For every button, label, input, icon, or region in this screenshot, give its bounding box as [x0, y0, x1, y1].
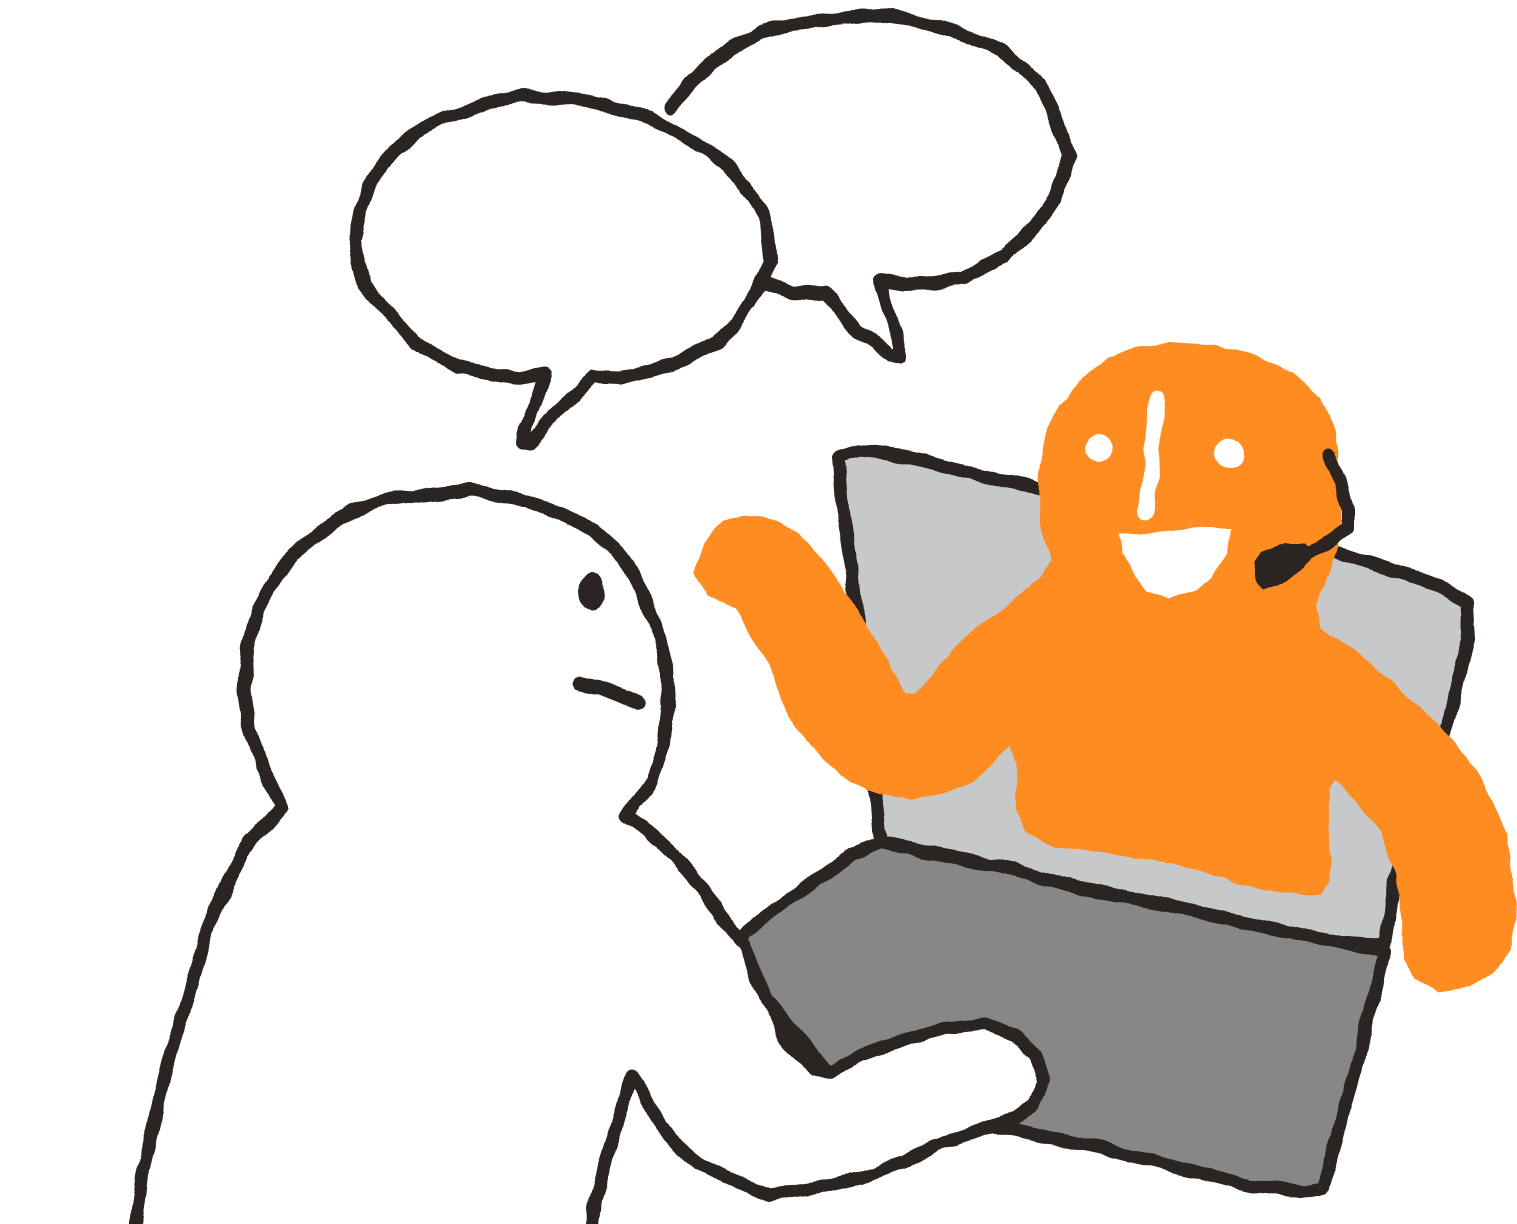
laptop base — [735, 842, 1385, 1192]
eye right — [1215, 439, 1245, 469]
person: orange figure — [695, 342, 1517, 992]
eye left — [1085, 434, 1113, 462]
nose — [1145, 400, 1157, 512]
speech bubble: back — [672, 15, 1068, 358]
smile — [1119, 528, 1232, 598]
headset band — [1300, 456, 1348, 556]
laptop screen — [838, 450, 1468, 945]
laptop — [735, 450, 1468, 1192]
person: white figure — [134, 490, 1044, 1224]
mouth — [580, 683, 638, 702]
speech bubble: front — [354, 96, 771, 445]
headset microphone — [1254, 543, 1315, 590]
eye — [579, 573, 605, 609]
